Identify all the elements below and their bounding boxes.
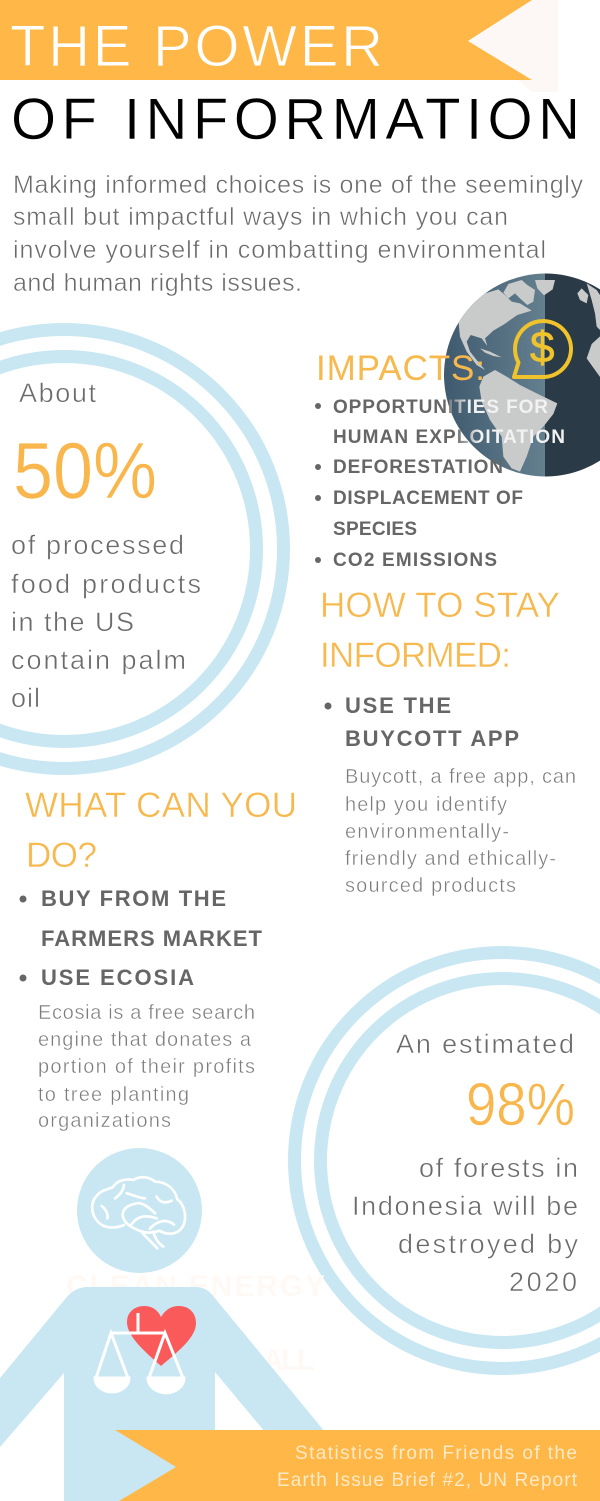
stat description: in the US (11, 607, 134, 637)
stat description: of forests in (419, 1153, 578, 1183)
what can you do list: BUY FROM THE (41, 886, 226, 911)
icon: heart (127, 1306, 196, 1366)
ecosia description: organizations (38, 1110, 171, 1132)
impacts list: SPECIES (333, 519, 417, 540)
what can you do list (20, 886, 263, 1132)
intro paragraph (13, 171, 584, 297)
buycott description: help you identify (345, 794, 507, 816)
stat description: contain palm (11, 645, 186, 675)
stat number 50%: 50% (13, 426, 157, 515)
impacts list: DISPLACEMENT OF (333, 488, 523, 509)
buycott description (345, 766, 576, 897)
buycott description: sourced products (345, 875, 516, 897)
icon: brain (92, 1177, 185, 1248)
intro paragraph: and human rights issues. (13, 269, 302, 297)
ecosia description: portion of their profits (38, 1056, 255, 1078)
footer ribbon (115, 1430, 600, 1501)
buycott description: environmentally- (345, 821, 509, 843)
faint ghost text (66, 1270, 325, 1377)
intro paragraph: small but impactful ways in which you can (13, 203, 508, 231)
ecosia description (38, 1002, 255, 1132)
stat: 98 percent forests (352, 1029, 578, 1297)
heading: how to stay informed: HOW TO STAY (320, 586, 560, 625)
intro paragraph: involve yourself in combatting environmental (13, 236, 546, 264)
impacts list: DEFORESTATION (333, 457, 503, 478)
title line one: THE POWER (10, 14, 383, 79)
icon: dollar speech bubble (514, 321, 571, 377)
left double ring (0, 330, 284, 768)
impacts list: HUMAN EXPLOITATION (333, 427, 565, 448)
impacts list: OPPORTUNITIES FOR (333, 397, 548, 418)
icon: dollar speech bubble: $ (530, 323, 554, 372)
intro paragraph: Making informed choices is one of the seemingly (13, 171, 584, 199)
stat description: Indonesia will be (352, 1191, 578, 1221)
footer source text (277, 1443, 578, 1491)
stat: 50 percent palm oil (11, 378, 201, 713)
stat description: of processed (11, 530, 184, 560)
figure: person (0, 1148, 330, 1501)
what can you do list: FARMERS MARKET (41, 926, 263, 951)
heading: how to stay informed (320, 586, 560, 675)
stat description (11, 530, 201, 713)
buycott description: Buycott, a free app, can (345, 766, 576, 788)
person body (0, 1287, 330, 1501)
buycott item: BUYCOTT APP (345, 726, 519, 751)
stat number 98%: 98% (466, 1071, 575, 1138)
stat: 98 percent forests: An estimated (396, 1029, 574, 1059)
ecosia description: engine that donates a (38, 1029, 252, 1051)
impacts list: CO2 EMISSIONS (333, 550, 497, 571)
heading: how to stay informed: INFORMED: (320, 636, 511, 675)
ecosia description: to tree planting (38, 1084, 189, 1106)
icon: globe with dollar speech bubble (444, 273, 600, 477)
title banner ribbon (0, 0, 532, 80)
impacts list (315, 397, 565, 571)
ecosia description: Ecosia is a free search (38, 1002, 255, 1024)
stat description: 2020 (509, 1267, 577, 1297)
footer source text: Earth Issue Brief #2, UN Report (277, 1470, 578, 1491)
heading: impacts: IMPACTS: (316, 349, 485, 388)
buycott item: USE THE (345, 693, 451, 718)
faint ghost text: CLEAN ENERGY (66, 1270, 325, 1303)
heading: what can you do (25, 786, 297, 875)
buycott description: friendly and ethically- (345, 848, 556, 870)
stat: 50 percent palm oil: About (19, 378, 96, 408)
heading: what can you do: DO? (26, 836, 97, 875)
footer source text: Statistics from Friends of the (295, 1443, 577, 1464)
icon: scales of justice (95, 1313, 184, 1393)
person head (77, 1148, 202, 1273)
stat description: oil (11, 683, 40, 713)
stat description: destroyed by (398, 1229, 578, 1259)
heading: what can you do: WHAT CAN YOU (25, 786, 297, 825)
stat description (352, 1153, 578, 1297)
faint ghost text: ALL (262, 1344, 315, 1377)
what can you do list: USE ECOSIA (41, 965, 194, 990)
right double ring (294, 952, 600, 1368)
buycott item (324, 693, 576, 897)
title line two: OF INFORMATION (11, 87, 580, 152)
stat description: food products (11, 569, 201, 599)
